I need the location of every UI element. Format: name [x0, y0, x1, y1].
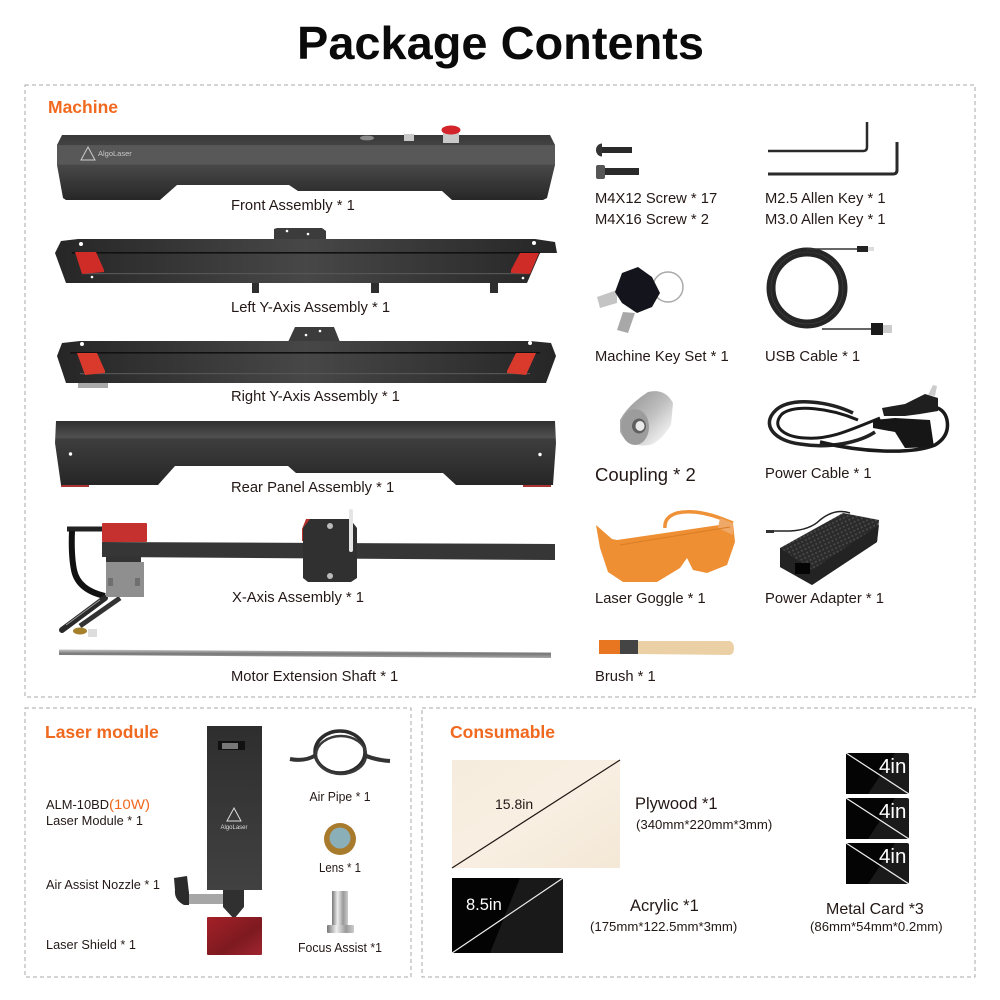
heading: consumable: Consumable [450, 722, 555, 742]
item: left y-axis assembly [55, 228, 557, 316]
item: metal cards: Metal Card *3 [826, 901, 924, 918]
item: motor extension shaft [59, 650, 551, 685]
item: plywood [452, 760, 772, 868]
item: brush: Brush * 1 [595, 669, 656, 685]
item: metal cards: (86mm*54mm*0.2mm) [810, 919, 943, 934]
item: power cable: Power Cable * 1 [765, 466, 872, 482]
item: usb cable [765, 246, 892, 365]
item: laser module body [174, 726, 262, 955]
item: acrylic: (175mm*122.5mm*3mm) [590, 919, 737, 934]
item: power adapter [765, 512, 884, 607]
item: air pipe: Air Pipe * 1 [310, 790, 370, 804]
item: brush [595, 640, 734, 685]
item: power cable [765, 385, 948, 482]
item: front assembly: Front Assembly * 1 [231, 198, 355, 214]
item: usb cable: USB Cable * 1 [765, 349, 860, 365]
item: acrylic: Acrylic *1 [630, 897, 699, 915]
text: module labels [46, 796, 160, 952]
text: module labels: Laser Shield * 1 [46, 938, 136, 952]
item: motor extension shaft: Motor Extension Shaft * 1 [231, 669, 398, 685]
title: Package Contents [297, 17, 704, 69]
item: rear panel assembly [55, 421, 556, 496]
item: lens: Lens * 1 [319, 861, 361, 875]
item: plywood: 15.8in [495, 796, 533, 812]
item: x-axis assembly: X-Axis Assembly * 1 [232, 590, 364, 606]
card 2 [846, 798, 909, 839]
panel: laser module [25, 708, 411, 977]
item: laser module body: AlgoLaser [220, 825, 248, 831]
item: acrylic: 8.5in [466, 896, 502, 914]
item: screws [595, 144, 717, 228]
item: right y-axis assembly [57, 327, 556, 405]
heading: laser module: Laser module [45, 722, 159, 742]
panel: consumable [422, 708, 975, 977]
item: laser goggle: Laser Goggle * 1 [595, 591, 706, 607]
text: module labels: Laser Module * 1 [46, 814, 143, 828]
text: module labels: Air Assist Nozzle * 1 [46, 878, 160, 892]
item: front assembly: AlgoLaser [98, 149, 132, 158]
text: module labels: (10W) [109, 796, 150, 812]
item: right y-axis assembly: Right Y-Axis Assembly * 1 [231, 389, 400, 405]
heading: machine: Machine [48, 97, 118, 117]
card 3 [846, 843, 909, 884]
item: allen keys: M3.0 Allen Key * 1 [765, 212, 886, 228]
item: lens [319, 823, 361, 875]
item: focus assist [298, 891, 382, 955]
item: machine key set: Machine Key Set * 1 [595, 349, 729, 365]
card 1 [846, 753, 909, 794]
item: acrylic [452, 878, 737, 953]
panel: machine [25, 85, 975, 697]
item: x-axis assembly [62, 509, 555, 637]
item: power adapter: Power Adapter * 1 [765, 591, 884, 607]
item: screws: M4X12 Screw * 17 [595, 191, 717, 207]
item: plywood: Plywood *1 [635, 795, 718, 813]
item: air pipe [290, 731, 390, 804]
text: module labels: ALM-10BD [46, 797, 109, 812]
item: focus assist: Focus Assist *1 [298, 941, 382, 955]
card 3: 4in [879, 845, 906, 868]
item: allen keys [765, 122, 897, 228]
item: left y-axis assembly: Left Y-Axis Assembly * 1 [231, 300, 390, 316]
item: allen keys: M2.5 Allen Key * 1 [765, 191, 886, 207]
item: coupling [595, 391, 696, 485]
card 1: 4in [879, 755, 906, 778]
item: screws: M4X16 Screw * 2 [595, 212, 709, 228]
item: laser goggle [595, 512, 735, 607]
item: front assembly [57, 126, 555, 214]
item: coupling: Coupling * 2 [595, 464, 696, 485]
card 2: 4in [879, 800, 906, 823]
item: machine key set [595, 267, 729, 365]
item: rear panel assembly: Rear Panel Assembly * 1 [231, 480, 394, 496]
item: metal cards [810, 753, 943, 934]
item: plywood: (340mm*220mm*3mm) [636, 817, 772, 832]
